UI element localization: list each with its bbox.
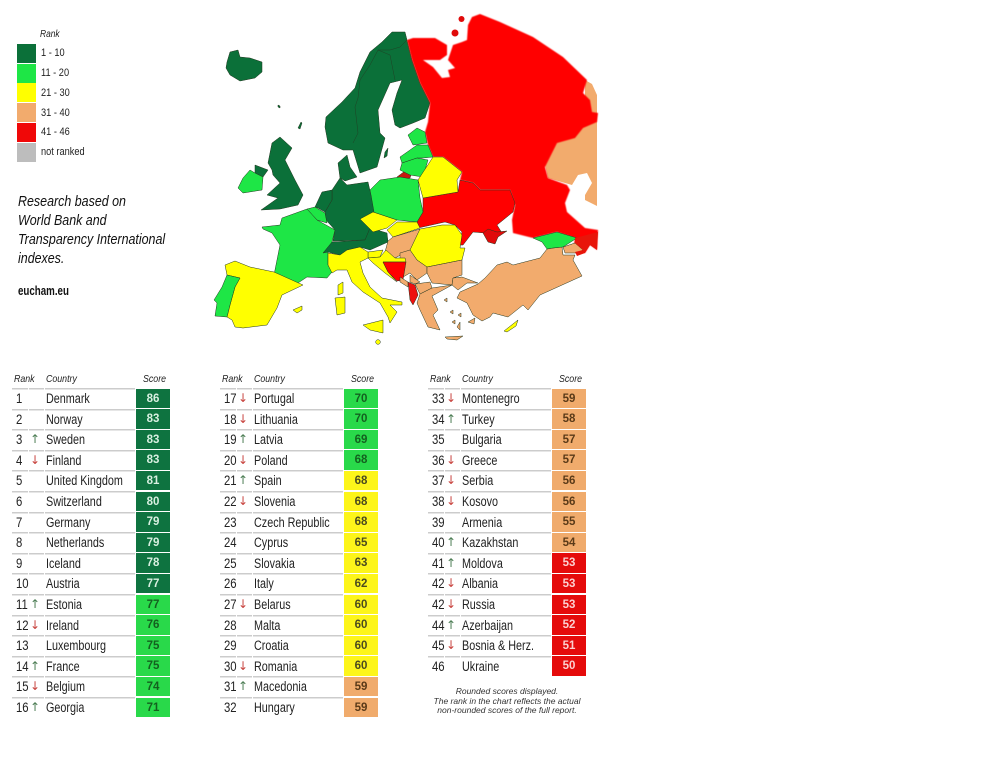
- Crimea: [483, 229, 507, 244]
- row Greece: 36: [432, 453, 445, 468]
- header score: Score: [559, 373, 582, 385]
- row Portugal: 17: [224, 391, 237, 406]
- row Serbia: [428, 470, 551, 491]
- row Finland: [12, 450, 135, 470]
- header country: Country: [254, 373, 285, 385]
- row Latvia: [220, 429, 343, 450]
- row Latvia: ↑: [238, 432, 248, 446]
- row Norway: Norway: [46, 412, 83, 427]
- row Netherlands: 8: [16, 535, 22, 550]
- row Macedonia: 31: [224, 679, 237, 694]
- row Portugal: Portugal: [254, 391, 294, 406]
- row Georgia: [12, 697, 135, 718]
- table column 1: 79: [147, 516, 159, 528]
- legend label 21-30: 21 - 30: [41, 87, 70, 99]
- source text: [18, 193, 166, 267]
- row Latvia: Latvia: [254, 432, 283, 447]
- Switzerland and Austria: [323, 228, 388, 255]
- source text: Research based on: [18, 193, 126, 210]
- row Bulgaria: Bulgaria: [462, 432, 502, 447]
- legend swatch 21-30: [17, 83, 36, 102]
- legend label 31-40: 31 - 40: [41, 107, 70, 119]
- Bulgaria: [427, 260, 462, 285]
- row Montenegro: 33: [432, 391, 445, 406]
- row Albania: 42: [432, 576, 445, 591]
- row Belarus: [220, 594, 343, 615]
- row Turkey: 34: [432, 412, 445, 427]
- Spain: [225, 261, 303, 328]
- table column 3: 53: [563, 557, 575, 569]
- row Russia: [428, 594, 551, 615]
- row United Kingdom: [12, 470, 135, 491]
- row Turkey: [428, 409, 551, 429]
- row Albania: Albania: [462, 576, 498, 591]
- table column 1: 83: [147, 454, 159, 466]
- row Greece: [428, 450, 551, 470]
- table column 2: 69: [355, 434, 367, 446]
- row Romania: ↓: [238, 659, 248, 673]
- row Romania: [220, 656, 343, 676]
- Iceland: [226, 50, 262, 81]
- Portugal: [214, 275, 240, 317]
- row Croatia: [220, 635, 343, 656]
- row Switzerland: 6: [16, 494, 22, 509]
- row Latvia: 19: [224, 432, 237, 447]
- row Russia: Russia: [462, 597, 495, 612]
- map of Europe: [214, 13, 599, 344]
- Belarus: [418, 157, 462, 198]
- Estonia: [408, 128, 427, 145]
- row Norway: 2: [16, 412, 22, 427]
- row Austria: Austria: [46, 576, 80, 591]
- table column 1: 75: [147, 640, 159, 652]
- table column 3: 58: [563, 413, 575, 425]
- row Bosnia and Herzegovina: Bosnia & Herz.: [462, 638, 534, 653]
- table column 3: 53: [563, 598, 575, 610]
- footnote: [434, 686, 581, 715]
- row Denmark: Denmark: [46, 391, 90, 406]
- row Sweden: 3: [16, 432, 22, 447]
- Serbia: [400, 250, 427, 280]
- row Romania: 30: [224, 659, 237, 674]
- row Azerbaijan: Azerbaijan: [462, 618, 513, 633]
- Montenegro: [400, 277, 408, 287]
- website credit: eucham.eu: [18, 284, 69, 298]
- row Iceland: 9: [16, 556, 22, 571]
- row Bosnia and Herzegovina: [428, 635, 551, 656]
- row Slovenia: [220, 491, 343, 512]
- row Italy: 26: [224, 576, 237, 591]
- legend heading: Rank: [40, 29, 60, 40]
- Italy: [328, 247, 402, 333]
- header score: Score: [351, 373, 374, 385]
- row Moldova: 41: [432, 556, 445, 571]
- row Kosovo: ↓: [446, 494, 456, 508]
- table column 1: 86: [147, 392, 159, 404]
- row Netherlands: [12, 532, 135, 553]
- row Croatia: 29: [224, 638, 237, 653]
- row Serbia: ↓: [446, 473, 456, 487]
- row Greece: Greece: [462, 453, 497, 468]
- Poland: [370, 177, 423, 222]
- table column 3: 55: [563, 516, 575, 528]
- row Spain: 21: [224, 473, 237, 488]
- source text: World Bank and: [18, 212, 107, 229]
- row Denmark: 1: [16, 391, 22, 406]
- row Portugal: [220, 388, 343, 409]
- table column 2: 59: [355, 681, 367, 693]
- table column 1: 76: [147, 619, 159, 631]
- Lithuania: [400, 158, 428, 177]
- row Belgium: Belgium: [46, 679, 85, 694]
- table column 1: 78: [147, 557, 159, 569]
- row Hungary: [220, 697, 343, 718]
- footnote: non-rounded scores of the full report.: [437, 705, 577, 715]
- table column 2: 70: [355, 413, 367, 425]
- row Italy: Italy: [254, 576, 274, 591]
- United Kingdom: [255, 137, 303, 210]
- table column 2: 68: [355, 516, 367, 528]
- table column 2: 62: [355, 578, 367, 590]
- table column 1: 75: [147, 660, 159, 672]
- Kazakhstan: [545, 80, 597, 206]
- row Ireland: 12: [16, 618, 29, 633]
- row Macedonia: ↑: [238, 679, 248, 693]
- row Albania: [428, 573, 551, 594]
- legend swatch not ranked: [17, 143, 36, 162]
- row Croatia: Croatia: [254, 638, 289, 653]
- row Iceland: Iceland: [46, 556, 81, 571]
- legend label 11-20: 11 - 20: [41, 67, 69, 79]
- row Turkey: Turkey: [462, 412, 495, 427]
- row Austria: 10: [16, 576, 29, 591]
- row Austria: [12, 573, 135, 594]
- row Armenia: Armenia: [462, 515, 502, 530]
- row Kazakhstan: Kazakhstan: [462, 535, 518, 550]
- table column 3: 57: [563, 434, 575, 446]
- Ukraine: [417, 180, 515, 245]
- header rank: Rank: [222, 373, 243, 385]
- row Poland: [220, 450, 343, 470]
- row Czech Republic: [220, 512, 343, 532]
- row France: [12, 656, 135, 676]
- Greece: [417, 285, 475, 340]
- row Armenia: 39: [432, 515, 445, 530]
- Albania: [408, 282, 418, 305]
- table column 2: [220, 373, 378, 717]
- row Sweden: ↑: [30, 432, 40, 446]
- row Lithuania: 18: [224, 412, 237, 427]
- row Moldova: [428, 553, 551, 573]
- Netherlands: [315, 190, 332, 212]
- row Germany: Germany: [46, 515, 90, 530]
- Russia: [407, 14, 598, 253]
- row United Kingdom: United Kingdom: [46, 473, 123, 488]
- row Spain: [220, 470, 343, 491]
- Hungary: [385, 229, 420, 258]
- table column 1: 77: [147, 598, 159, 610]
- row Finland: Finland: [46, 453, 81, 468]
- row Ukraine: Ukraine: [462, 659, 499, 674]
- row Poland: Poland: [254, 453, 288, 468]
- row Russia: 42: [432, 597, 445, 612]
- footnote: The rank in the chart reflects the actual: [434, 696, 580, 706]
- row Montenegro: Montenegro: [462, 391, 520, 406]
- table column 1: 83: [147, 413, 159, 425]
- row Montenegro: [428, 388, 551, 409]
- Armenia: [563, 243, 583, 253]
- table column 2: 60: [355, 660, 367, 672]
- table column 3: 56: [563, 475, 575, 487]
- Romania: [410, 225, 465, 267]
- row Estonia: Estonia: [46, 597, 82, 612]
- Georgia: [533, 232, 577, 249]
- Azerbaijan: [575, 232, 598, 256]
- legend swatch 31-40: [17, 103, 36, 122]
- Faroe and Shetland islands: [278, 105, 302, 129]
- row Moldova: Moldova: [462, 556, 503, 571]
- header rank: Rank: [14, 373, 35, 385]
- Kaliningrad: [397, 171, 411, 179]
- row Kazakhstan: [428, 532, 551, 553]
- row France: 14: [16, 659, 29, 674]
- row Slovakia: [220, 553, 343, 573]
- row Switzerland: Switzerland: [46, 494, 102, 509]
- Czech Republic: [360, 212, 397, 232]
- Ireland: [238, 170, 263, 193]
- Scandinavia: Norway, Sweden, Finland: [325, 32, 430, 173]
- row Lithuania: ↓: [238, 412, 248, 426]
- row Germany: 7: [16, 515, 22, 530]
- row Italy: [220, 573, 343, 594]
- table column 3: 52: [563, 619, 575, 631]
- table column 2: 59: [355, 702, 367, 714]
- row Azerbaijan: [428, 615, 551, 635]
- row Bosnia and Herzegovina: 45: [432, 638, 445, 653]
- table column 3: 56: [563, 496, 575, 508]
- row France: France: [46, 659, 80, 674]
- row Slovakia: 25: [224, 556, 237, 571]
- header country: Country: [46, 373, 77, 385]
- row Macedonia: [220, 676, 343, 697]
- Kosovo: [410, 275, 420, 284]
- row Portugal: ↓: [238, 391, 248, 405]
- row Estonia: 11: [16, 597, 28, 612]
- row Belarus: 27: [224, 597, 237, 612]
- row Slovenia: 22: [224, 494, 237, 509]
- table column 1: 79: [147, 537, 159, 549]
- row Belgium: ↓: [30, 679, 40, 693]
- header country: Country: [462, 373, 493, 385]
- table column 1: 80: [147, 496, 159, 508]
- table column 3: 57: [563, 454, 575, 466]
- Gotland: [384, 148, 388, 158]
- source text: Transparency International: [18, 231, 165, 248]
- row Kosovo: Kosovo: [462, 494, 498, 509]
- row Malta: Malta: [254, 618, 280, 633]
- row Belarus: ↓: [238, 597, 248, 611]
- row Russia: ↓: [446, 597, 456, 611]
- row Lithuania: [220, 409, 343, 429]
- row Belgium: 15: [16, 679, 29, 694]
- table column 3: 51: [563, 640, 575, 652]
- row Denmark: [12, 388, 135, 409]
- row Kazakhstan: ↑: [446, 535, 456, 549]
- Slovenia: [368, 250, 383, 258]
- row Kosovo: 38: [432, 494, 445, 509]
- row France: ↑: [30, 659, 40, 673]
- Malta: [376, 340, 380, 344]
- table column 1: 74: [147, 681, 159, 693]
- row Ireland: ↓: [30, 618, 40, 632]
- Belgium and Luxembourg: [307, 207, 327, 223]
- table column 1: 81: [147, 475, 159, 487]
- Latvia: [400, 145, 433, 163]
- row Switzerland: [12, 491, 135, 512]
- row Bulgaria: [428, 429, 551, 450]
- table column 3: 59: [563, 392, 575, 404]
- legend label 41-46: 41 - 46: [41, 126, 70, 138]
- legend swatch 11-20: [17, 64, 36, 82]
- row Luxembourg: 13: [16, 638, 29, 653]
- row Georgia: Georgia: [46, 700, 84, 715]
- row Spain: ↑: [238, 473, 248, 487]
- row Romania: Romania: [254, 659, 297, 674]
- table column 2: 60: [355, 640, 367, 652]
- legend label 1-10: 1 - 10: [41, 47, 65, 59]
- row Turkey: ↑: [446, 412, 456, 426]
- row Ireland: Ireland: [46, 618, 79, 633]
- table column 3: 50: [563, 660, 575, 672]
- row Czech Republic: 23: [224, 515, 237, 530]
- row Estonia: ↑: [30, 597, 40, 611]
- table column 2: 68: [355, 496, 367, 508]
- table column 1: [12, 373, 170, 717]
- table column 3: [428, 373, 586, 676]
- header rank: Rank: [430, 373, 451, 385]
- row Iceland: [12, 553, 135, 573]
- table column 1: 83: [147, 434, 159, 446]
- row Greece: ↓: [446, 453, 456, 467]
- Cyprus: [504, 320, 518, 332]
- row Georgia: 16: [16, 700, 29, 715]
- table column 2: 68: [355, 475, 367, 487]
- Croatia: [368, 250, 406, 282]
- row Serbia: Serbia: [462, 473, 493, 488]
- row Serbia: 37: [432, 473, 445, 488]
- legend: [17, 29, 85, 162]
- table column 1: 77: [147, 578, 159, 590]
- row Cyprus: 24: [224, 535, 237, 550]
- row Poland: 20: [224, 453, 237, 468]
- Macedonia: [415, 282, 432, 294]
- row Estonia: [12, 594, 135, 615]
- Turkey: [452, 247, 582, 321]
- table column 2: 68: [355, 454, 367, 466]
- row Netherlands: Netherlands: [46, 535, 104, 550]
- Bosnia: [383, 262, 406, 281]
- row Hungary: 32: [224, 700, 237, 715]
- table column 2: 60: [355, 619, 367, 631]
- row Slovakia: Slovakia: [254, 556, 295, 571]
- row Poland: ↓: [238, 453, 248, 467]
- row Finland: 4: [16, 453, 22, 468]
- table column 3: 53: [563, 578, 575, 590]
- table column 2: 65: [355, 537, 367, 549]
- row Sweden: Sweden: [46, 432, 85, 447]
- table column 2: 60: [355, 598, 367, 610]
- row Azerbaijan: ↑: [446, 618, 456, 632]
- table column 1: 71: [147, 702, 159, 714]
- row Ireland: [12, 615, 135, 635]
- row Slovenia: Slovenia: [254, 494, 295, 509]
- legend swatch 41-46: [17, 123, 36, 142]
- row Macedonia: Macedonia: [254, 679, 307, 694]
- legend label not ranked: not ranked: [41, 146, 85, 158]
- row Cyprus: [220, 532, 343, 553]
- row Cyprus: Cyprus: [254, 535, 288, 550]
- row Finland: ↓: [30, 453, 40, 467]
- row Bosnia and Herzegovina: ↓: [446, 638, 456, 652]
- row Belarus: Belarus: [254, 597, 291, 612]
- row Kosovo: [428, 491, 551, 512]
- row Sweden: [12, 429, 135, 450]
- row Albania: ↓: [446, 576, 456, 590]
- row Armenia: [428, 512, 551, 532]
- legend swatch 1-10: [17, 44, 36, 63]
- Germany: [325, 178, 374, 241]
- row Malta: 28: [224, 618, 237, 633]
- source text: indexes.: [18, 250, 64, 267]
- header score: Score: [143, 373, 166, 385]
- row Montenegro: ↓: [446, 391, 456, 405]
- footnote: Rounded scores displayed.: [456, 686, 558, 696]
- table column 3: 54: [563, 537, 575, 549]
- row Georgia: ↑: [30, 700, 40, 714]
- row Hungary: Hungary: [254, 700, 295, 715]
- row Spain: Spain: [254, 473, 282, 488]
- row Bulgaria: 35: [432, 432, 445, 447]
- row Kazakhstan: 40: [432, 535, 445, 550]
- Denmark: [338, 155, 357, 181]
- row Slovenia: ↓: [238, 494, 248, 508]
- row Belgium: [12, 676, 135, 697]
- row Malta: [220, 615, 343, 635]
- table column 2: 63: [355, 557, 367, 569]
- row Luxembourg: [12, 635, 135, 656]
- row Ukraine: [428, 656, 551, 676]
- row Ukraine: 46: [432, 659, 445, 674]
- row Czech Republic: Czech Republic: [254, 515, 330, 530]
- table column 2: 70: [355, 392, 367, 404]
- France: [262, 209, 335, 283]
- Slovakia: [387, 222, 420, 237]
- row United Kingdom: 5: [16, 473, 22, 488]
- row Moldova: ↑: [446, 556, 456, 570]
- row Azerbaijan: 44: [432, 618, 445, 633]
- row Germany: [12, 512, 135, 532]
- row Luxembourg: Luxembourg: [46, 638, 106, 653]
- row Norway: [12, 409, 135, 429]
- row Lithuania: Lithuania: [254, 412, 298, 427]
